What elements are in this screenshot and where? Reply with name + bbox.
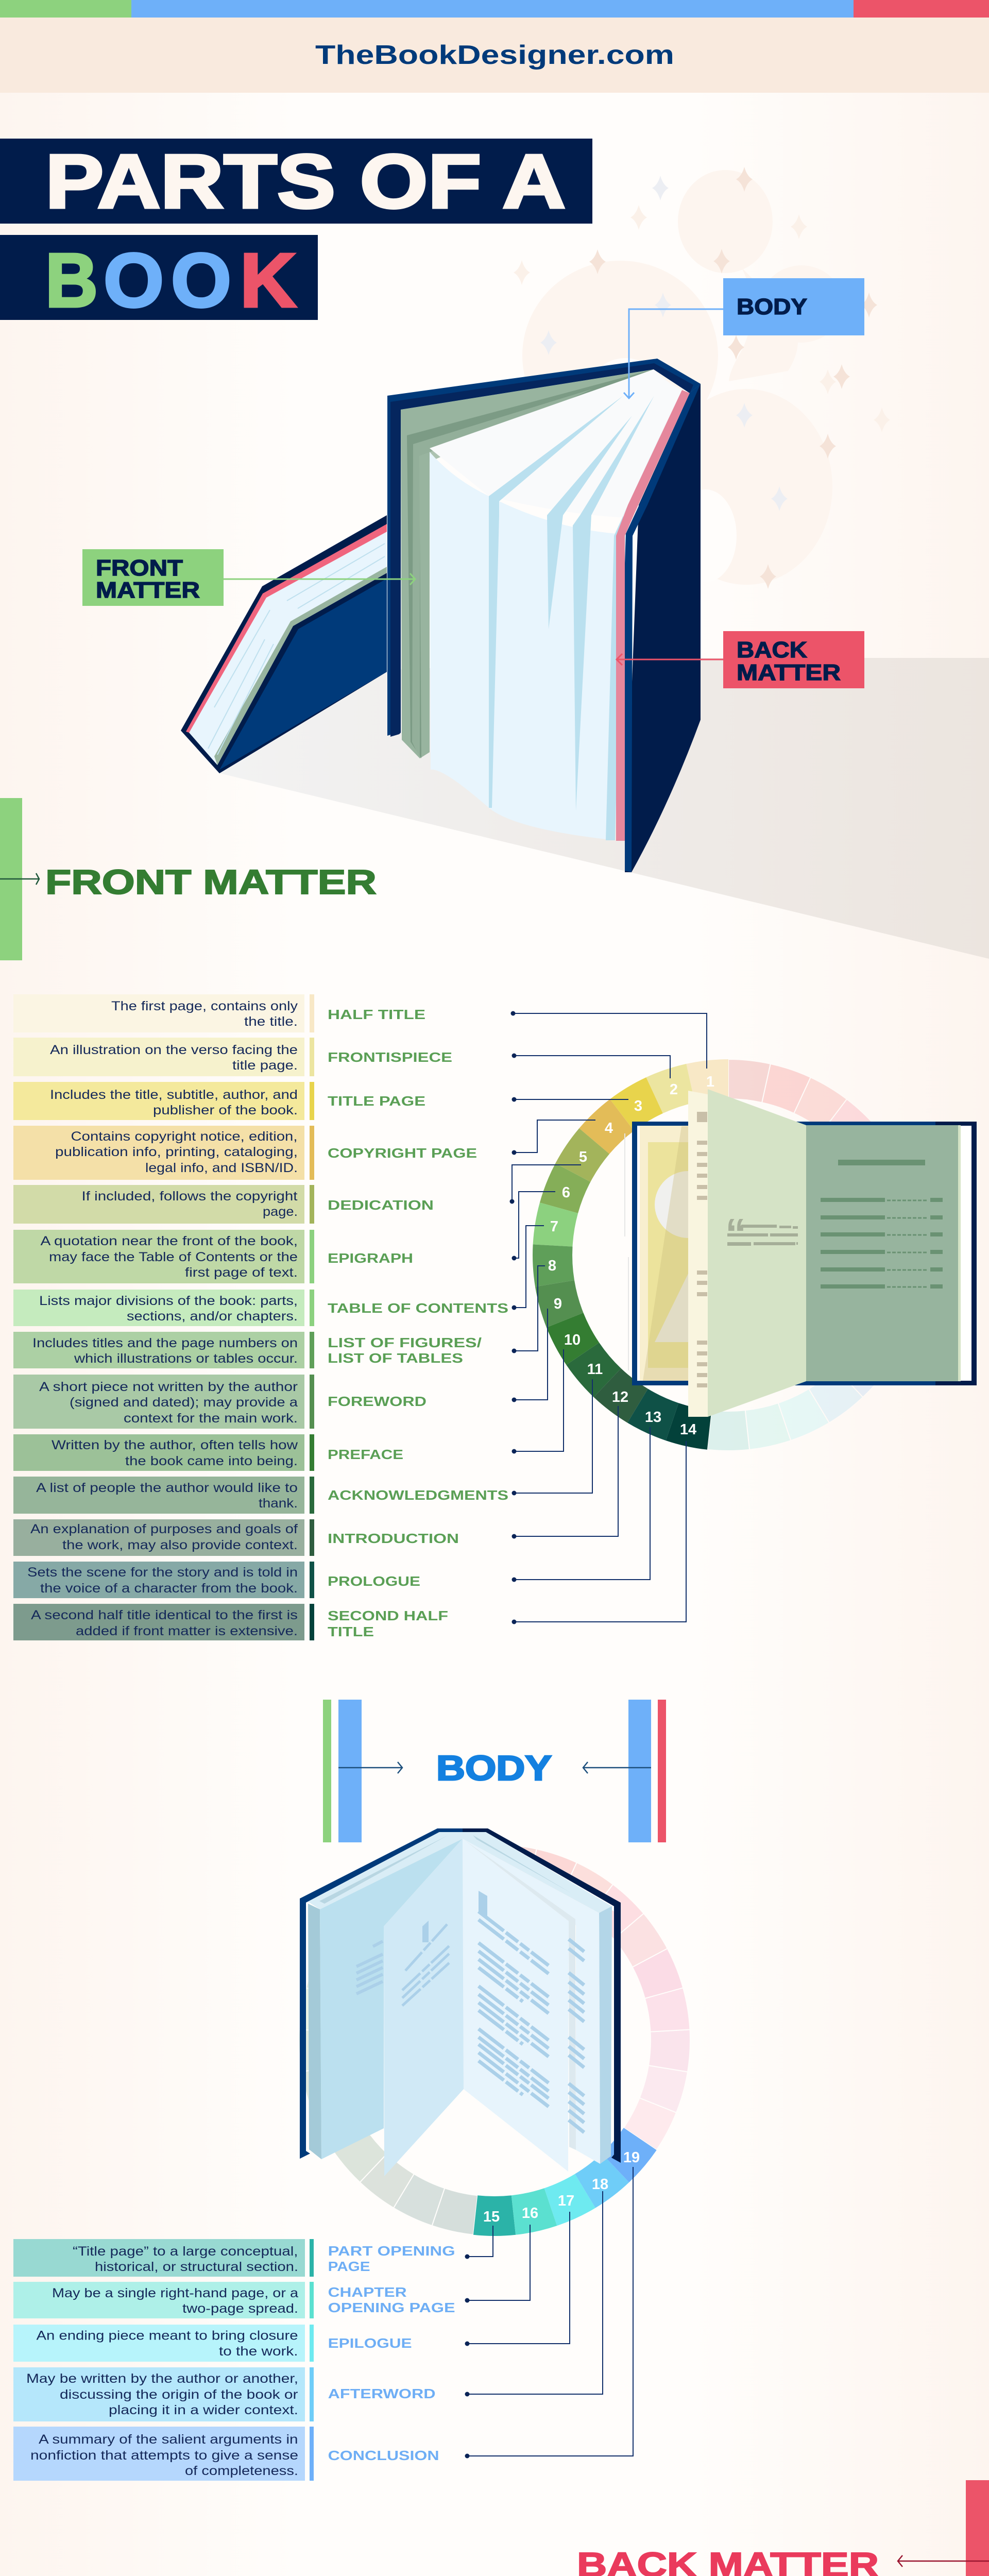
front matter wheel: 6 <box>562 1184 570 1201</box>
front matter wheel: 13 <box>645 1409 661 1426</box>
front matter wheel: 3 <box>634 1098 642 1114</box>
label: back matter <box>617 631 864 688</box>
floor shadow of hero book <box>220 658 989 959</box>
front matter wheel: 7 <box>550 1218 558 1235</box>
front matter wheel: 5 <box>579 1149 587 1165</box>
panel: front matter descriptions: added if front matter is extensive. <box>76 1624 298 1638</box>
panel: front matter descriptions: The first page, contains only <box>111 999 298 1013</box>
panel: front matter descriptions: the book came into being. <box>125 1454 298 1468</box>
panel: front matter descriptions: publication info, printing, cataloging, <box>55 1145 298 1159</box>
panel: front matter descriptions: publisher of the book. <box>153 1103 298 1117</box>
body part names: PAGE <box>328 2259 370 2274</box>
body wheel <box>299 1844 690 2236</box>
panel: front matter descriptions: If included, follows the copyright <box>81 1189 298 1204</box>
body wheel numbers: 17 <box>558 2193 574 2209</box>
panel: front matter descriptions: A short piece not written by the author <box>39 1380 298 1394</box>
front matter part names: LIST OF FIGURES/ <box>328 1335 482 1350</box>
front matter wheel: 8 <box>548 1258 556 1274</box>
body part names <box>328 2243 455 2463</box>
label: body: BODY <box>737 294 807 319</box>
body part names: EPILOGUE <box>328 2335 412 2351</box>
section heading: back matter <box>577 2480 989 2576</box>
front matter part names: HALF TITLE <box>328 1007 425 1022</box>
open book with title pages: “ <box>725 1210 746 1257</box>
label: back matter: MATTER <box>737 660 841 685</box>
panel: front matter descriptions: which illustrations or tables occur. <box>74 1351 298 1366</box>
title: book <box>0 235 318 323</box>
front matter part names: INTRODUCTION <box>328 1531 459 1546</box>
front matter part names: DEDICATION <box>328 1197 434 1213</box>
front matter part names: EPIGRAPH <box>328 1250 413 1266</box>
front matter part names: SECOND HALF <box>328 1608 448 1623</box>
open book with body pages <box>300 1828 621 2176</box>
body part names: OPENING PAGE <box>328 2300 455 2315</box>
label: front matter: FRONT <box>96 555 183 581</box>
panel: front matter descriptions <box>13 994 314 1640</box>
body wheel numbers: 18 <box>592 2176 608 2193</box>
panel: body descriptions: An ending piece meant to bring closure <box>36 2329 298 2343</box>
panel: front matter descriptions: legal info, and ISBN/ID. <box>145 1161 298 1175</box>
panel: body descriptions: placing it in a wider context. <box>109 2403 298 2417</box>
panel: front matter descriptions: A second half title identical to the first is <box>31 1608 298 1622</box>
front matter part names <box>328 1007 508 1639</box>
front matter wheel <box>533 1059 924 1451</box>
panel: body descriptions: two-page spread. <box>182 2301 298 2316</box>
panel: front matter descriptions: Includes titles and the page numbers on <box>32 1336 298 1350</box>
body connectors <box>465 2167 633 2459</box>
front matter wheel: 12 <box>612 1389 628 1405</box>
panel: front matter descriptions: the voice of a character from the book. <box>40 1581 298 1596</box>
panel: front matter descriptions: Includes the title, subtitle, author, and <box>50 1088 298 1102</box>
title: book: B <box>45 238 98 323</box>
body part names: PART OPENING <box>328 2243 455 2259</box>
panel: front matter descriptions: Written by the author, often tells how <box>52 1438 298 1452</box>
section heading: front matter <box>0 798 377 960</box>
body wheel numbers: 15 <box>483 2209 500 2225</box>
section heading: front matter: FRONT MATTER <box>45 863 377 902</box>
front matter part names: FOREWORD <box>328 1394 427 1409</box>
front matter wheel: 14 <box>680 1421 696 1438</box>
front matter wheel: 1 <box>706 1074 714 1090</box>
panel: front matter descriptions: the work, may also provide context. <box>62 1538 298 1552</box>
top colour bar <box>0 0 989 18</box>
front matter part names: TITLE <box>328 1624 374 1639</box>
panel: body descriptions: of completeness. <box>185 2464 298 2478</box>
panel: front matter descriptions: first page of text. <box>185 1265 298 1280</box>
panel: body descriptions: May be written by the author or another, <box>26 2371 298 2386</box>
panel: front matter descriptions: An explanation of purposes and goals of <box>30 1522 298 1536</box>
body wheel numbers: 16 <box>522 2205 538 2222</box>
front matter wheel: 2 <box>670 1081 678 1098</box>
panel: front matter descriptions: Sets the scene for the story and is told in <box>27 1565 298 1580</box>
hero book illustration <box>181 359 701 872</box>
label: front matter <box>82 549 415 606</box>
panel: front matter descriptions: A list of people the author would like to <box>36 1481 298 1495</box>
panel: body descriptions: “Title page” to a large conceptual, <box>73 2244 298 2259</box>
background swirl and sparkles <box>514 167 890 589</box>
front matter part names: ACKNOWLEDGMENTS <box>328 1487 508 1503</box>
front matter wheel: 9 <box>554 1296 562 1312</box>
panel: front matter descriptions: An illustration on the verso facing the <box>50 1043 298 1057</box>
front matter connectors <box>510 1011 707 1624</box>
panel: front matter descriptions: A quotation near the front of the book, <box>40 1234 298 1248</box>
front matter part names: TABLE OF CONTENTS <box>328 1300 508 1316</box>
body wheel numbers: 19 <box>623 2149 640 2166</box>
title: book: K <box>240 238 296 323</box>
panel: front matter descriptions: context for the main work. <box>124 1411 298 1426</box>
panel: front matter descriptions: Contains copyright notice, edition, <box>71 1129 298 1144</box>
body part names: CONCLUSION <box>328 2448 439 2463</box>
front matter part names: PROLOGUE <box>328 1573 420 1589</box>
panel: body descriptions: May be a single right-hand page, or a <box>52 2286 298 2300</box>
front matter part names: FRONTISPIECE <box>328 1049 452 1065</box>
panel: body descriptions: discussing the origin of the book or <box>60 2387 298 2402</box>
body part names: CHAPTER <box>328 2284 407 2300</box>
panel: body descriptions: nonfiction that attempts to give a sense <box>30 2448 298 2463</box>
body wheel numbers <box>483 2149 640 2225</box>
panel: body descriptions: to the work. <box>219 2344 298 2359</box>
panel: front matter descriptions: page. <box>263 1205 298 1219</box>
label: front matter: MATTER <box>96 578 200 603</box>
panel: front matter descriptions: may face the Table of Contents or the <box>49 1250 298 1264</box>
panel: front matter descriptions: title page. <box>232 1058 298 1073</box>
front matter part names: TITLE PAGE <box>328 1093 425 1109</box>
label: body <box>624 278 864 398</box>
section heading: body: BODY <box>436 1749 552 1788</box>
panel: front matter descriptions: (signed and dated); may provide a <box>70 1395 298 1410</box>
front matter wheel: 11 <box>587 1361 603 1378</box>
title: parts of a: PARTS OF A <box>45 139 566 224</box>
panel: front matter descriptions: thank. <box>259 1496 298 1511</box>
title: book: O <box>171 238 231 323</box>
header band: TheBookDesigner.com <box>315 40 674 70</box>
open book with title pages <box>624 1089 977 1417</box>
panel: body descriptions <box>13 2239 314 2481</box>
body part names: AFTERWORD <box>328 2386 436 2401</box>
header band <box>0 18 989 93</box>
panel: body descriptions: A summary of the salient arguments in <box>39 2432 298 2447</box>
panel: body descriptions: historical, or structural section. <box>95 2260 298 2274</box>
front matter part names: LIST OF TABLES <box>328 1350 463 1366</box>
front matter wheel: 10 <box>564 1332 581 1348</box>
label: back matter: BACK <box>737 637 807 663</box>
front matter part names: COPYRIGHT PAGE <box>328 1145 477 1161</box>
panel: front matter descriptions: sections, and/or chapters. <box>127 1309 298 1324</box>
panel: front matter descriptions: Lists major divisions of the book: parts, <box>39 1294 298 1308</box>
front matter wheel: 4 <box>605 1120 613 1137</box>
panel: front matter descriptions: the title. <box>244 1014 298 1029</box>
title: book: O <box>104 238 164 323</box>
front matter part names: PREFACE <box>328 1447 403 1462</box>
section heading: body <box>323 1700 666 1842</box>
